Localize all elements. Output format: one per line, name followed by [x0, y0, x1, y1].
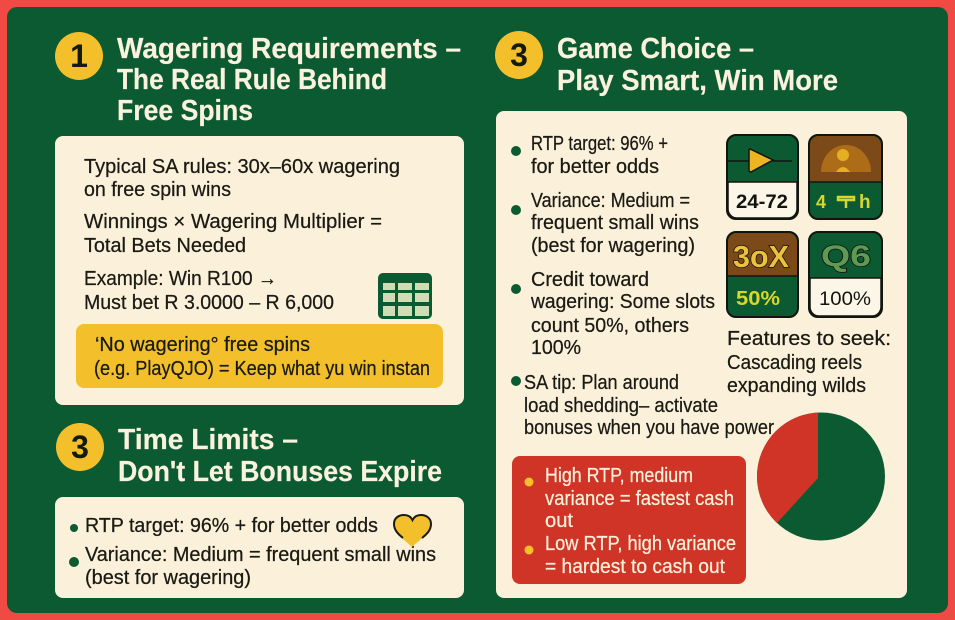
- callout: cash out speed: = hardest to cash out: [545, 556, 725, 578]
- tile: 24-72: 24-72: [736, 192, 788, 213]
- panel: wagering rules: [55, 136, 464, 405]
- callout: cash out speed: variance = fastest cash: [545, 488, 734, 510]
- tile: 30x 50%: 50%: [736, 288, 780, 310]
- text: features to seek: [727, 328, 891, 397]
- pie chart: [757, 412, 885, 540]
- callout: no wagering free spins: (e.g. PlayQJO) = Keep what yu win instan: [94, 358, 430, 380]
- bullet: variance: (best for wagering): [85, 567, 251, 589]
- section 3 number badge: time limits: 3: [71, 429, 89, 465]
- heading: wagering requirements: [117, 33, 461, 127]
- text: typical rules: Typical SA rules: 30x–60x wagering: [84, 156, 400, 178]
- tile: Q6 100%: Q6: [821, 240, 871, 273]
- bullet: SA tip: bonuses when you have power: [524, 417, 774, 439]
- section 1 number badge: 1: [70, 38, 88, 74]
- section 3 number badge: game choice: 3: [510, 37, 528, 73]
- text: typical rules: [84, 156, 400, 201]
- bullet: variance: frequent small wins: [531, 212, 699, 234]
- bullet: variance: [511, 190, 699, 257]
- callout: cash out speed: High RTP, medium: [545, 465, 693, 487]
- bullet: credit toward wagering: count 50%, others: [531, 315, 689, 337]
- bullet: SA tip: [511, 372, 774, 439]
- text: formula: [84, 211, 382, 257]
- panel: game choice: [496, 111, 907, 598]
- text: formula: Winnings × Wagering Multiplier =: [84, 211, 382, 233]
- heading: time limits: Don't Let Bonuses Expire: [118, 456, 442, 488]
- tile: Q6 100%: 100%: [819, 289, 871, 310]
- heading: time limits: [118, 424, 442, 488]
- bullet: credit toward wagering: wagering: Some slots: [530, 291, 715, 313]
- section 3 number badge: game choice: [495, 31, 543, 79]
- heading: game choice: Game Choice –: [557, 33, 754, 65]
- tile: 4 h: [809, 135, 882, 219]
- text: features to seek: expanding wilds: [727, 375, 866, 397]
- tile: 30x 50%: [727, 232, 798, 317]
- tile: 4 h: h: [859, 192, 871, 213]
- bullet: rtp target: for better odds: [531, 156, 659, 178]
- bullet: rtp target: [511, 133, 668, 178]
- text: example: Must bet R 3.0000 – R 6,000: [84, 292, 334, 314]
- text: features to seek: Features to seek:: [727, 328, 891, 350]
- callout: no wagering free spins: ‘No wagering° free spins: [95, 334, 310, 356]
- text: typical rules: on free spin wins: [84, 179, 231, 201]
- callout: cash out speed: Low RTP, high variance: [545, 533, 736, 555]
- bullet: rtp target: RTP target: 96% + for better odds: [85, 515, 378, 537]
- icon: spreadsheet: [378, 273, 432, 319]
- bullet: variance: [69, 544, 436, 589]
- heading: game choice: [557, 33, 838, 97]
- tile: 4 h: 4: [816, 192, 826, 212]
- callout: no wagering free spins: [76, 324, 443, 388]
- heading: wagering requirements: Wagering Requirements –: [117, 33, 461, 65]
- heading: wagering requirements: Free Spins: [117, 95, 253, 127]
- bullet: rtp target: RTP target: 96% +: [531, 133, 668, 155]
- heading: time limits: Time Limits –: [118, 424, 298, 456]
- text: example: Example: Win R100 →: [84, 268, 277, 290]
- panel: time limits: [55, 497, 464, 598]
- text: formula: Total Bets Needed: [84, 235, 246, 257]
- text: features to seek: Cascading reels: [727, 352, 862, 374]
- bullet: SA tip: load shedding– activate: [524, 395, 718, 417]
- tile: 24-72: [727, 135, 798, 219]
- bullet: variance: Variance: Medium = frequent small wins: [85, 544, 436, 566]
- section 3 number badge: time limits: [56, 423, 104, 471]
- heading: game choice: Play Smart, Win More: [557, 65, 838, 97]
- bullet: variance: Variance: Medium =: [531, 190, 690, 212]
- bullet: credit toward wagering: 100%: [531, 337, 581, 359]
- callout: cash out speed: out: [545, 510, 573, 532]
- bullet: credit toward wagering: [511, 269, 715, 359]
- text: example: [84, 268, 334, 314]
- bullet: variance: (best for wagering): [531, 235, 695, 257]
- tile: 30x 50%: 3oX: [733, 239, 789, 274]
- section 1 number badge: [55, 32, 103, 80]
- callout: cash out speed: [512, 456, 746, 584]
- bullet: SA tip: SA tip: Plan around: [524, 372, 679, 394]
- heading: wagering requirements: The Real Rule Behind: [117, 64, 387, 96]
- icon: heart: [394, 515, 431, 547]
- tile: Q6 100%: [809, 232, 882, 317]
- bullet: credit toward wagering: Credit toward: [531, 269, 649, 291]
